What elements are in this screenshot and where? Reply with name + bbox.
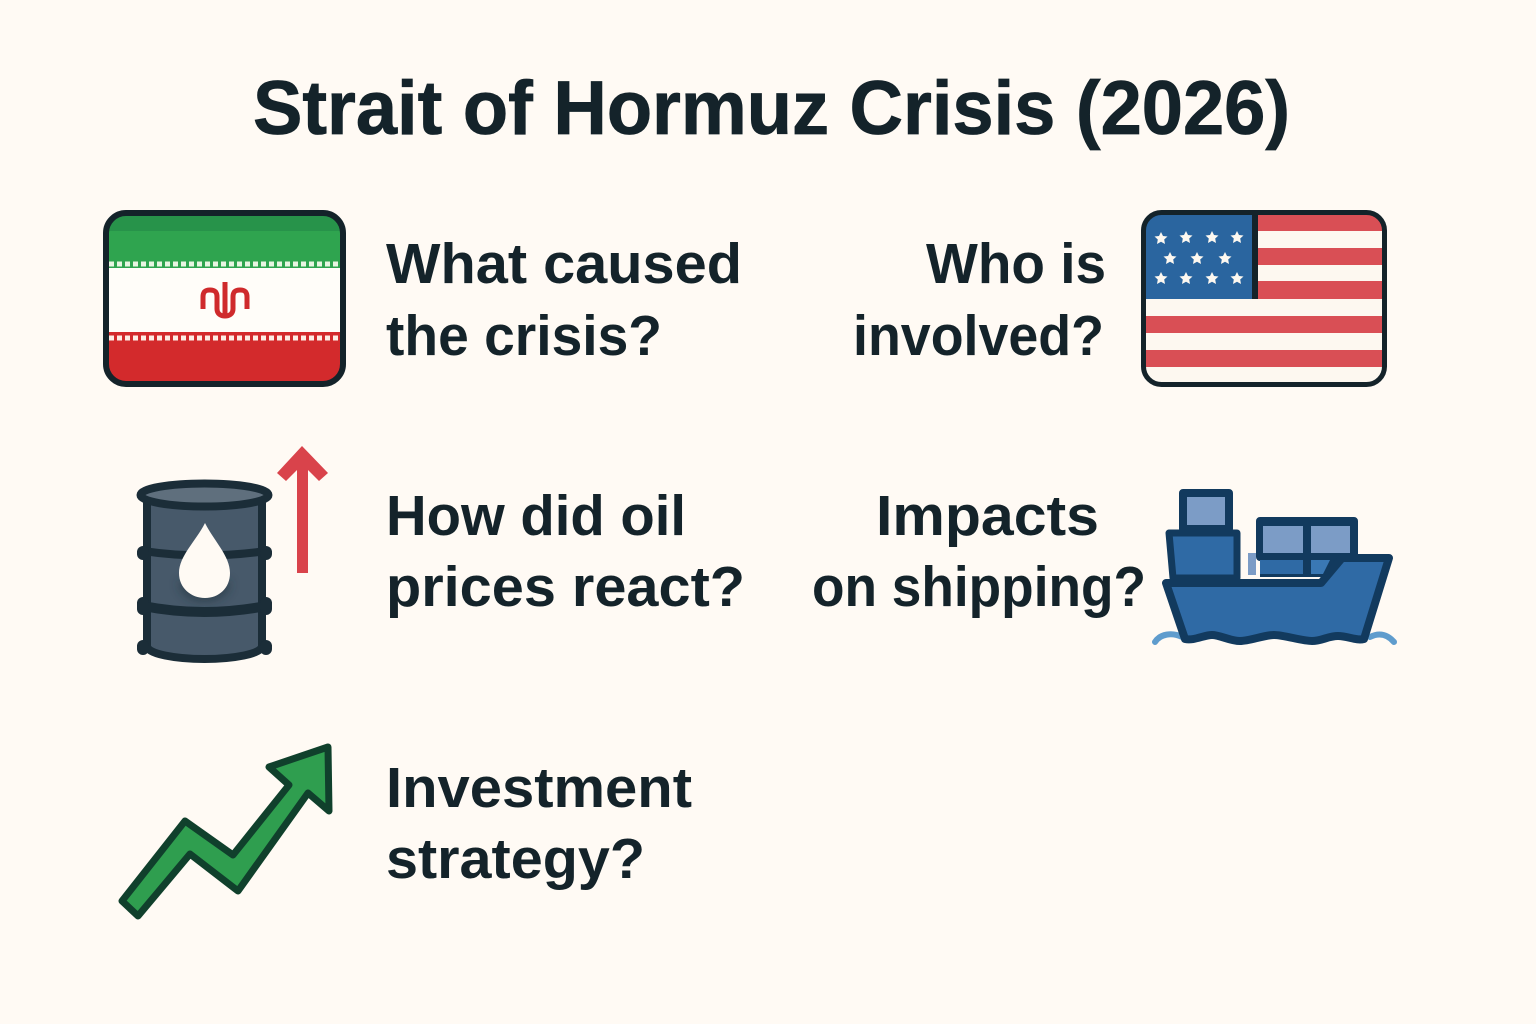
icon: stars [1154,231,1244,284]
question text [386,756,692,891]
icon: Iran flag [106,213,343,384]
question text: strategy? [386,827,645,891]
panel: who is involved [853,212,1385,385]
question text [812,484,1146,619]
icon: US flag [1143,212,1385,385]
question text [853,232,1106,368]
question text: the crisis? [386,304,662,368]
question text: Investment [386,756,692,820]
question text: on shipping? [812,555,1146,619]
panel: investment strategy [122,747,692,916]
question text [386,232,742,368]
panel: impacts on shipping [812,484,1394,642]
icon: red up arrow [277,446,328,573]
panel: oil prices [137,446,745,659]
panel: what caused the crisis [106,213,742,384]
title: Strait of Hormuz Crisis (2026) [253,66,1290,151]
question text: prices react? [386,555,745,619]
icon: green rising arrow [122,747,329,916]
icon: oil drop [179,523,230,598]
question text: What caused [386,232,742,296]
icon: oil barrel [137,484,272,659]
question text: Who is [926,232,1106,296]
question text: involved? [853,304,1104,368]
icon: cargo ship [1155,493,1394,642]
question text [386,484,745,619]
icon: flag emblem [203,282,247,316]
question text: Impacts [876,484,1099,548]
question text: How did oil [386,484,686,548]
